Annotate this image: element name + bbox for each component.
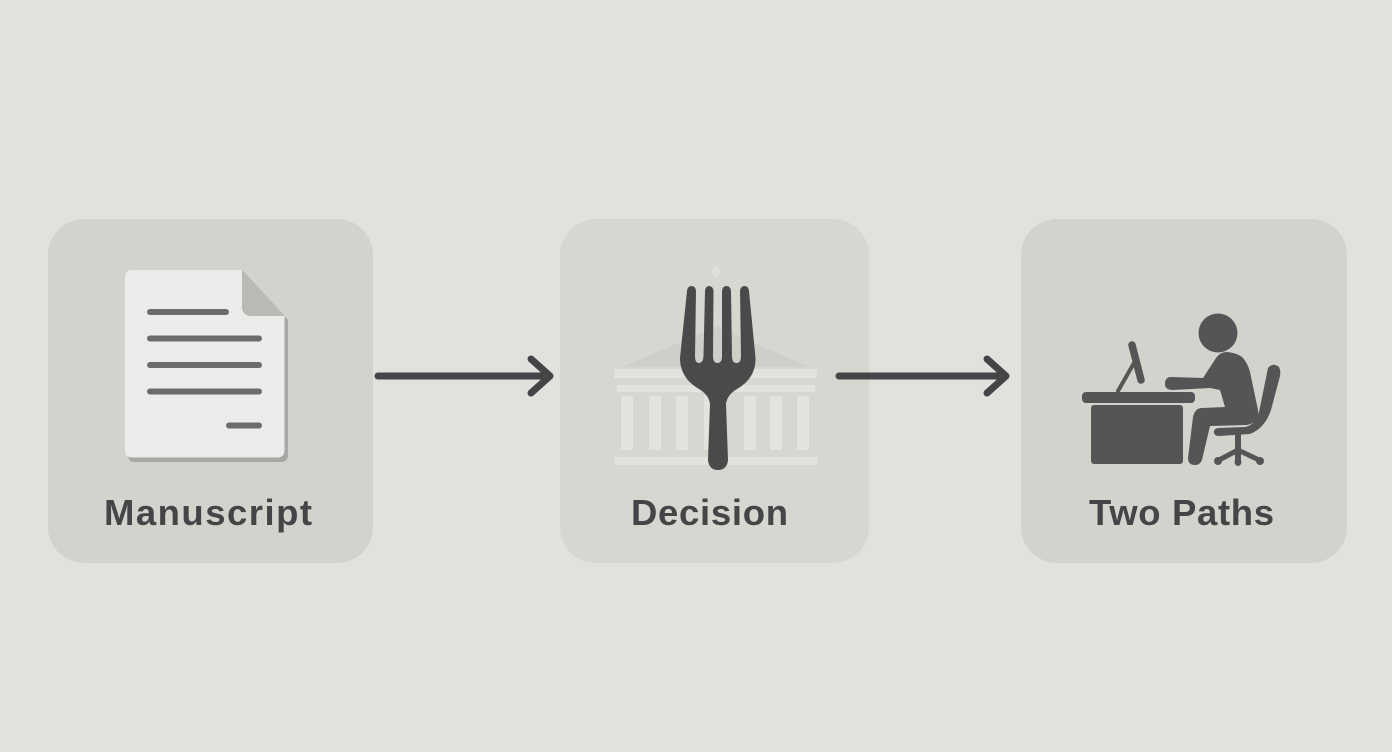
panel: manuscript	[48, 219, 373, 563]
building pediment	[623, 326, 808, 367]
document page	[125, 270, 284, 458]
icon: fork	[680, 286, 756, 470]
person head	[1198, 314, 1238, 352]
two paths panel background	[1021, 219, 1347, 563]
chair base	[1219, 434, 1259, 463]
building finial	[711, 264, 722, 278]
panel: decision	[560, 219, 869, 563]
panel: two paths	[1021, 219, 1347, 563]
two paths label: Two Paths	[1089, 492, 1274, 533]
document shadow	[128, 273, 288, 462]
desk top	[1082, 392, 1195, 403]
icon: document	[125, 270, 288, 462]
arrow: manuscript to decision	[378, 359, 550, 393]
icon: classical building	[614, 264, 818, 465]
manuscript panel background	[48, 219, 373, 563]
icon: person at desk	[1082, 314, 1280, 466]
chair casters	[1214, 457, 1222, 465]
person body	[1165, 352, 1258, 465]
computer monitor	[1118, 345, 1141, 391]
document text lines	[150, 312, 259, 426]
office chair	[1214, 365, 1280, 436]
decision panel background	[560, 219, 869, 563]
arrow: decision to two paths	[839, 359, 1006, 393]
decision label: Decision	[631, 492, 788, 533]
manuscript label: Manuscript	[104, 492, 312, 533]
document corner fold	[242, 270, 285, 316]
desk pedestal	[1091, 405, 1183, 464]
